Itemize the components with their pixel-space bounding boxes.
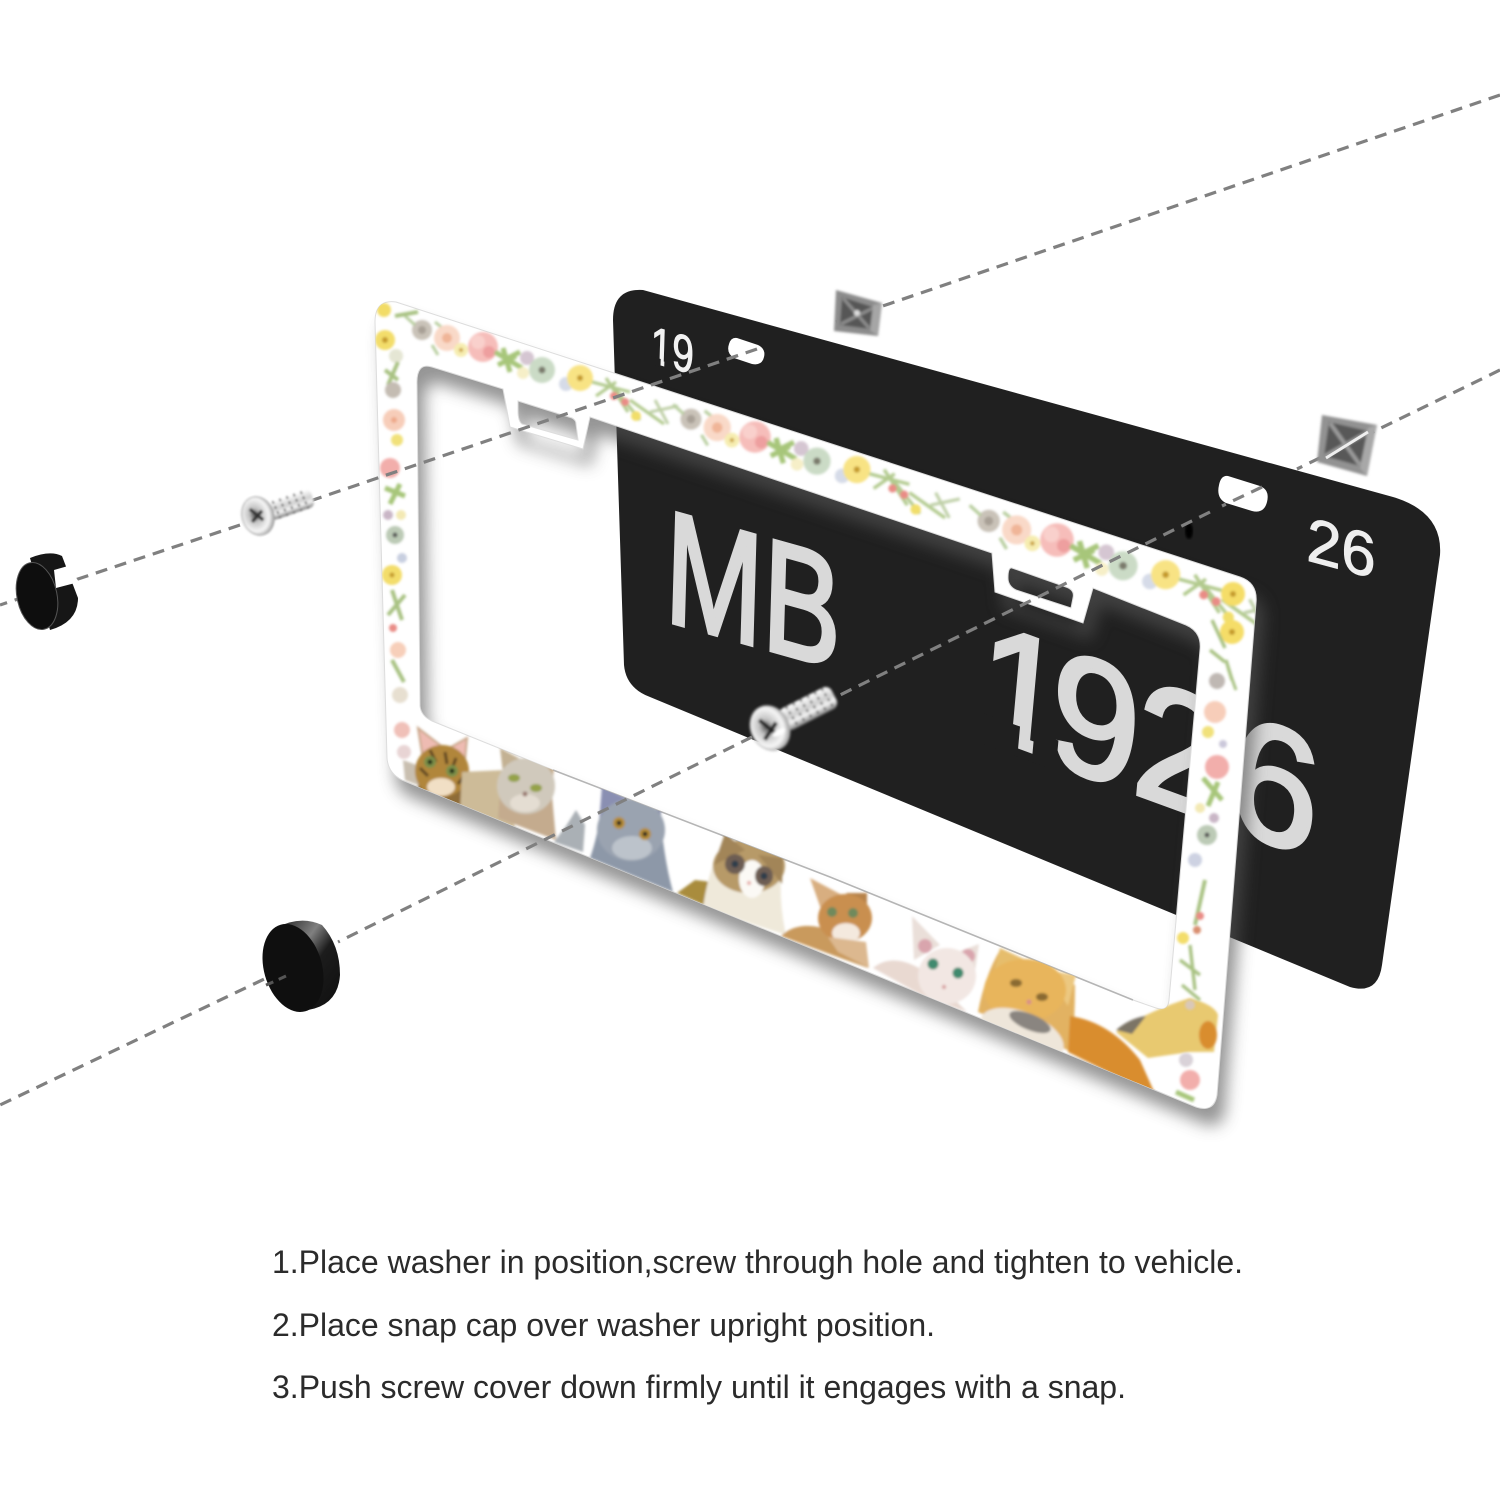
cat illustrations along bottom bar (403, 728, 1218, 1096)
cat: blue grey (590, 786, 673, 892)
black license plate with slots (613, 290, 1440, 989)
cat: abyssinian (781, 878, 872, 968)
floral garland on frame (375, 303, 1275, 1100)
step 3: 3.Push screw cover down firmly until it engages with a snap. (272, 1369, 1126, 1405)
cat: ragdoll (677, 833, 786, 935)
plate smudge (1185, 523, 1193, 539)
cat: bengal (402, 725, 471, 804)
flowers: left bar (375, 330, 411, 759)
dashed guide line: lower screw axis (0, 487, 1262, 1105)
icon: square nut top (834, 290, 882, 336)
instruction text block (272, 1244, 1243, 1405)
frame inner bottom edge (553, 770, 1133, 1000)
icon: square nut right (1317, 415, 1377, 476)
step 2: 2.Place snap cap over washer upright position. (272, 1307, 935, 1343)
icon: screw upper (237, 479, 319, 540)
cat: orange persian (976, 947, 1077, 1052)
white highlight through right nut (1326, 432, 1368, 458)
plate text: 26: 26 (1305, 505, 1377, 592)
dashed guide line: top screw axis (0, 349, 757, 605)
cat paw: grey (554, 810, 585, 852)
step 1: 1.Place washer in position,screw through hole and tighten to vehicle. (272, 1244, 1243, 1280)
icon: screw lower (743, 675, 845, 757)
icon: snap cap lower (253, 917, 340, 1019)
cat: beige (460, 748, 556, 840)
plate text: MB: MB (663, 476, 844, 703)
cat: orange tail and body (1068, 998, 1218, 1096)
flowers: top bar (377, 303, 1275, 626)
flowers: right bar (1176, 582, 1245, 1100)
frame drop shadow (383, 319, 1264, 1126)
plate text: 19: 19 (650, 315, 695, 385)
icon: snap cap left (10, 553, 79, 633)
plate text: 1926: 1926 (970, 584, 1327, 894)
white plate frame (375, 302, 1256, 1109)
dashed guide line: upper right segment (836, 95, 1500, 469)
dash visible on lower cap (262, 976, 286, 987)
cat: sphynx (873, 916, 979, 1012)
